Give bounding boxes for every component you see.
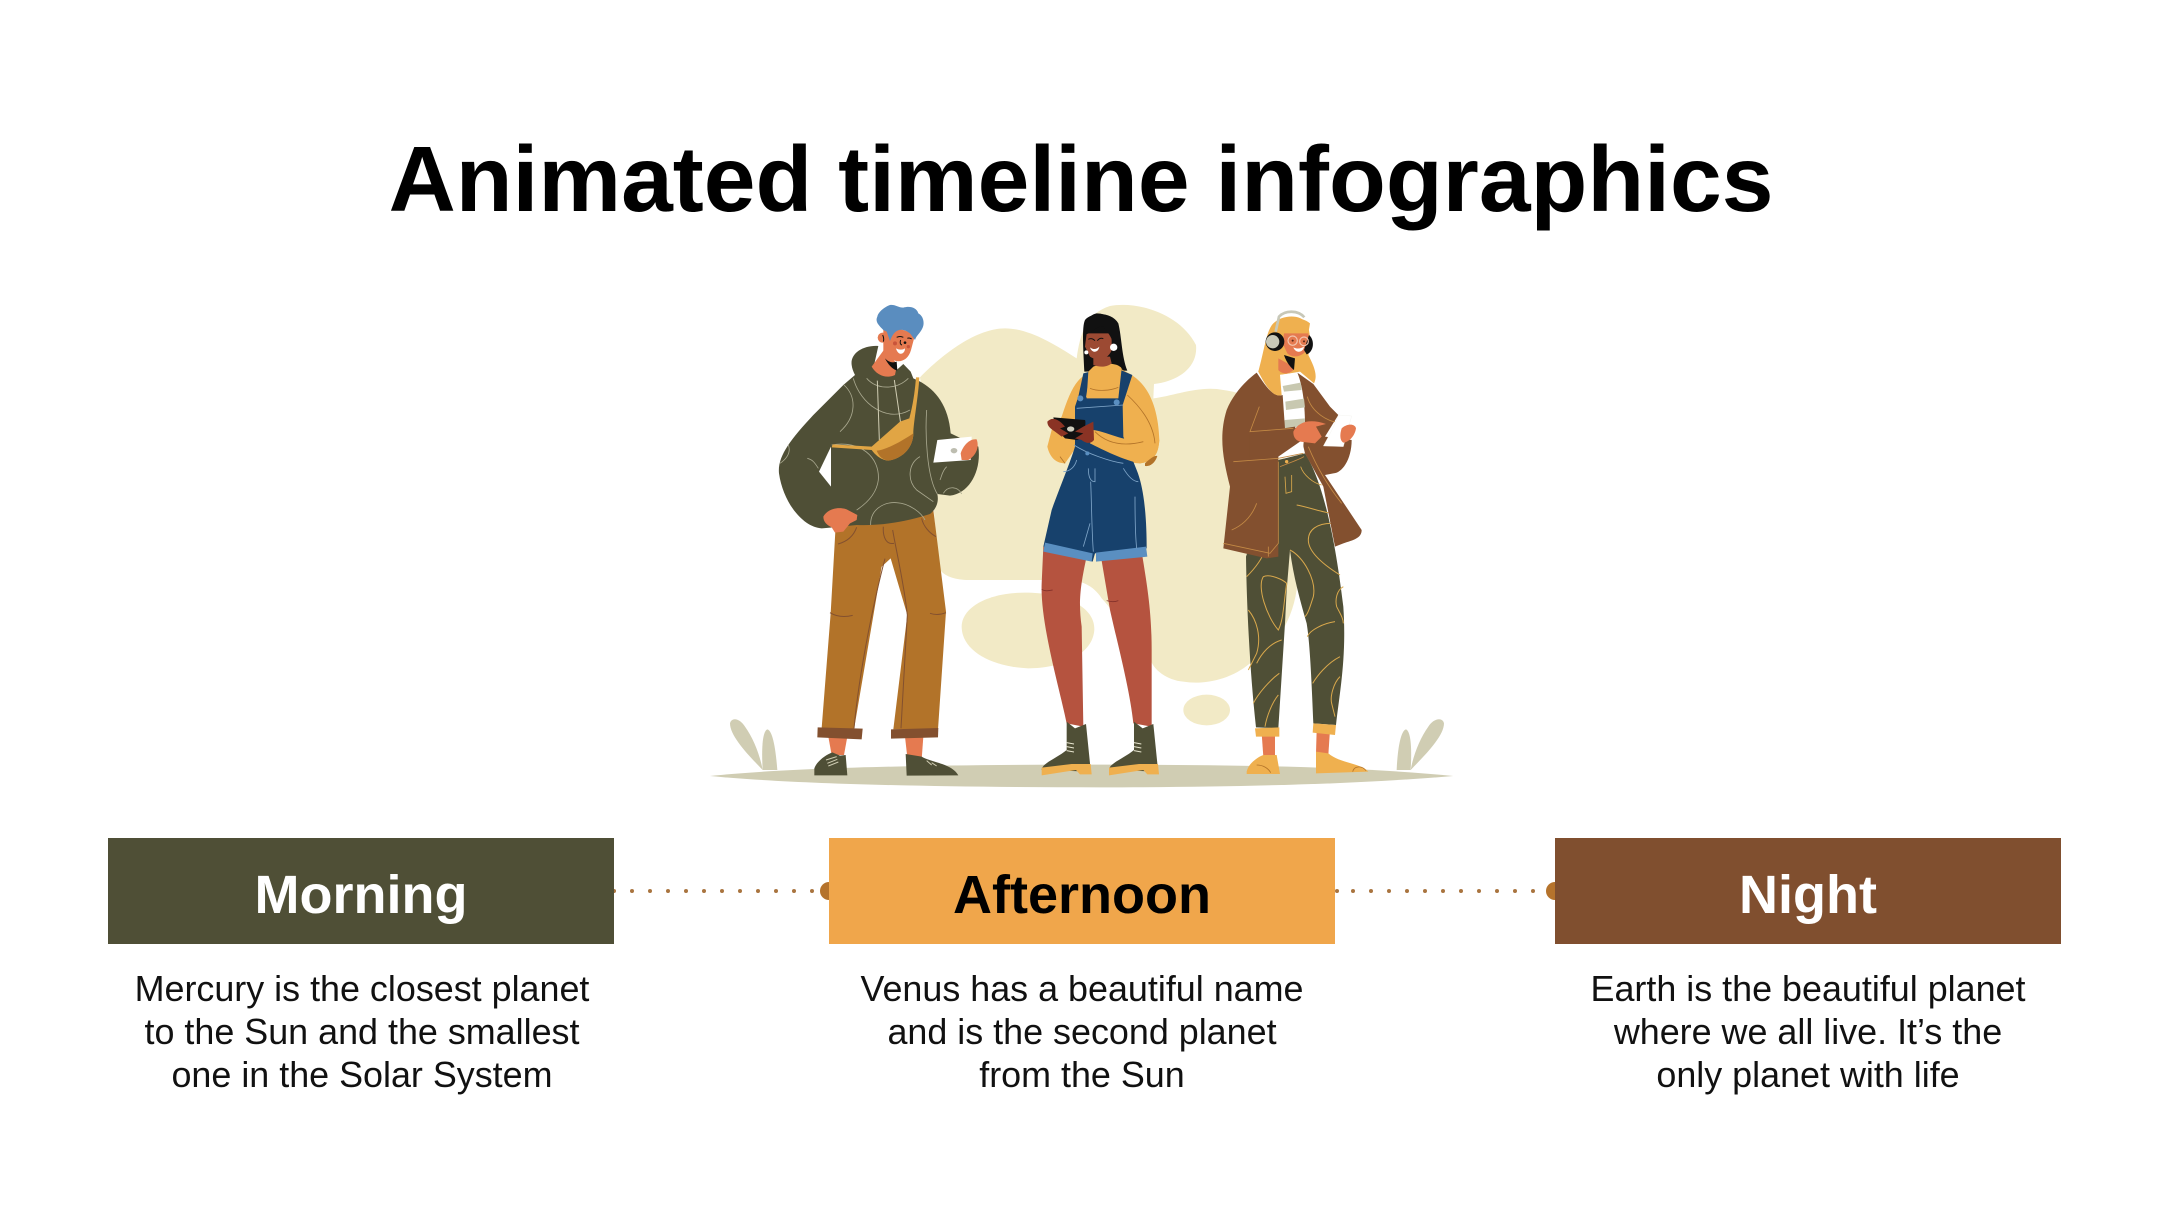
- person: man with hoodie: [779, 305, 979, 776]
- timeline box: Morning: [108, 838, 614, 944]
- description: Night: only planet with life: [1656, 1055, 1960, 1095]
- timeline box: Morning: Morning: [255, 865, 467, 925]
- connector: afternoon to night: [1335, 882, 1555, 900]
- title: Animated timeline infographics: [389, 127, 1773, 231]
- description: Night: [1591, 969, 2026, 1095]
- description: Morning: [135, 969, 590, 1095]
- description: Morning: Mercury is the closest planet: [135, 969, 589, 1009]
- description: Night: where we all live. It’s the: [1614, 1012, 2002, 1052]
- description: Night: Earth is the beautiful planet: [1591, 969, 2025, 1009]
- person: woman with headphones: [1222, 312, 1368, 774]
- description: Afternoon: and is the second planet: [887, 1012, 1277, 1052]
- timeline box: Afternoon: [829, 838, 1335, 944]
- description: Afternoon: from the Sun: [979, 1055, 1185, 1095]
- timeline box: Night: Night: [1739, 865, 1877, 925]
- description: Afternoon: [860, 969, 1303, 1095]
- timeline box: Night: [1555, 838, 2061, 944]
- description: Morning: to the Sun and the smallest: [145, 1012, 579, 1052]
- background blobs: [920, 305, 1298, 725]
- person: woman in overalls: [1042, 313, 1159, 775]
- ground shadow and plants: [710, 719, 1453, 787]
- description: Afternoon: Venus has a beautiful name: [860, 969, 1303, 1009]
- timeline box: Afternoon: Afternoon: [953, 865, 1211, 925]
- connector: morning to afternoon: [614, 882, 829, 900]
- description: Morning: one in the Solar System: [171, 1055, 553, 1095]
